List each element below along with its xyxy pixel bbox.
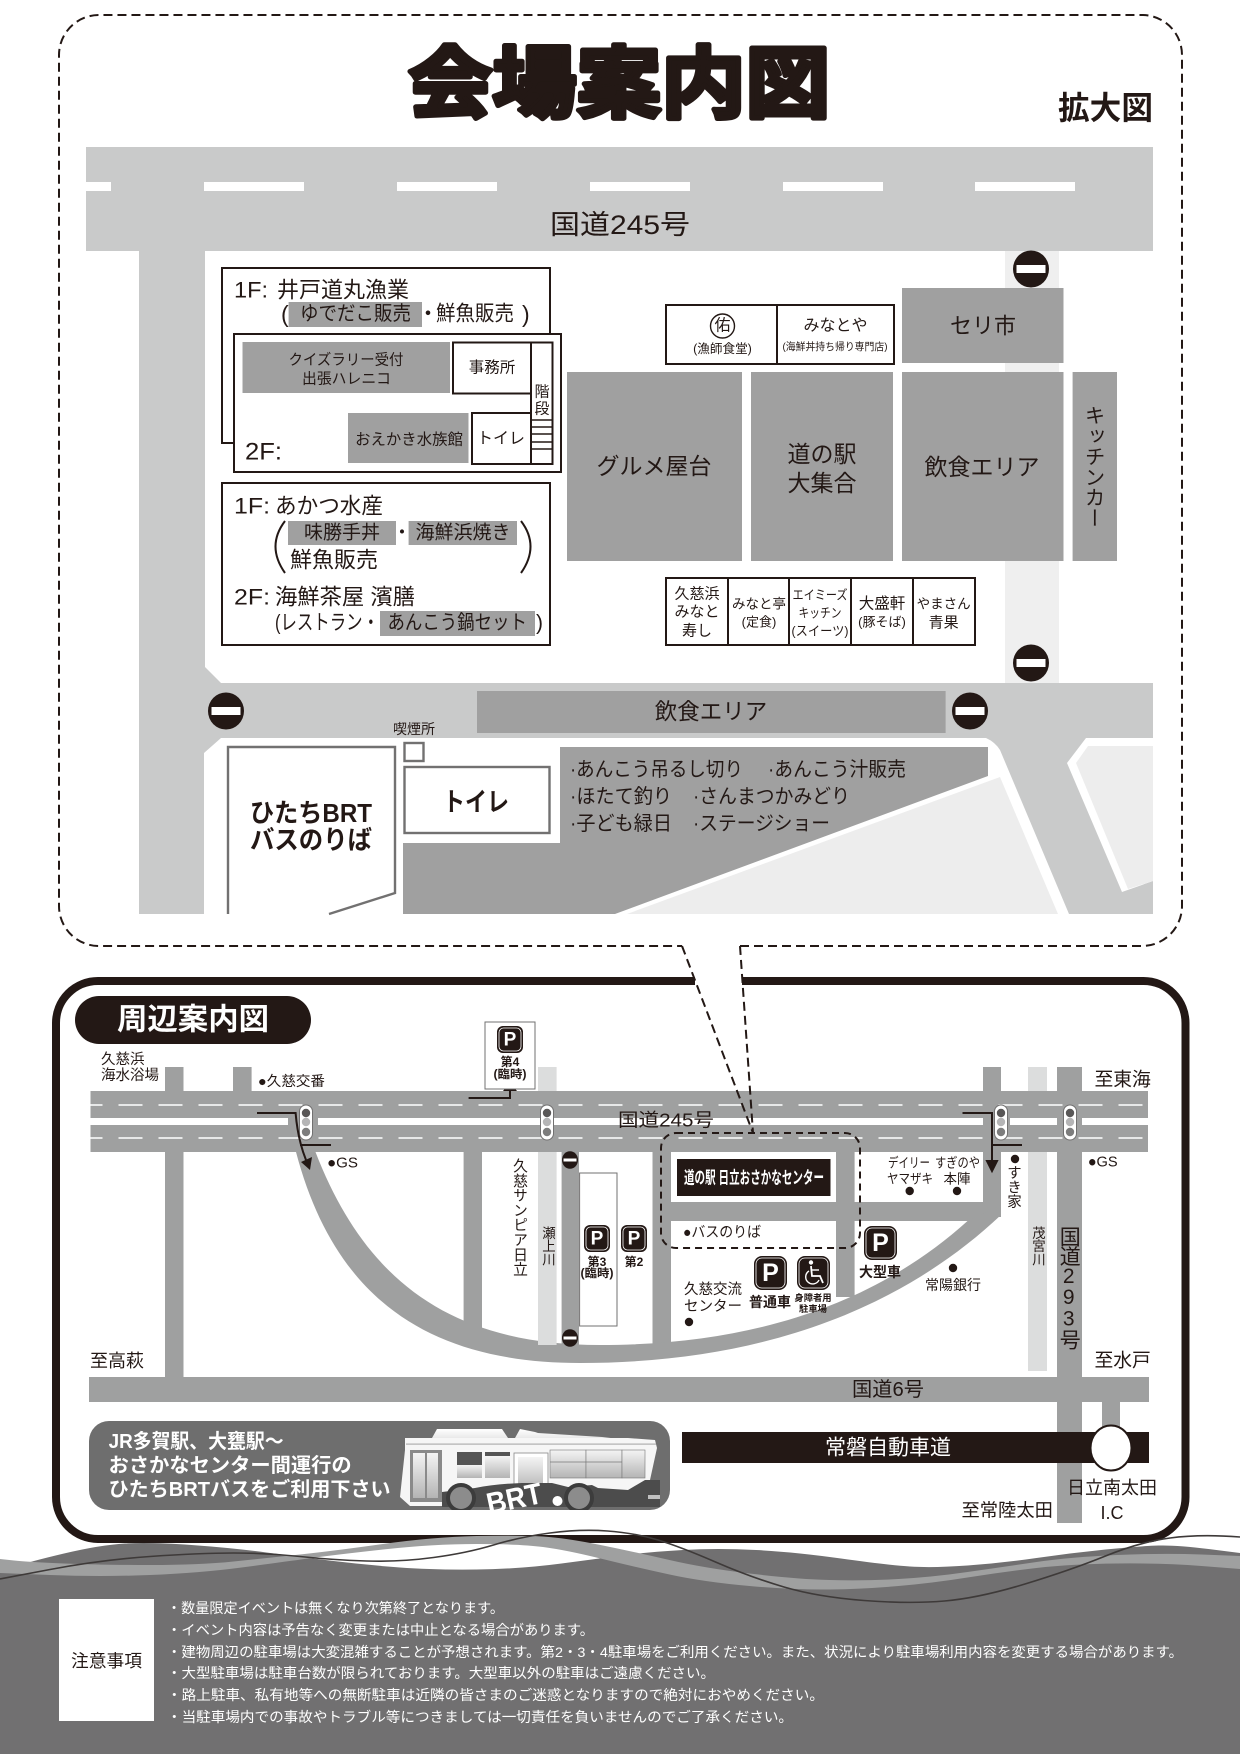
parking: regular car: 普通車 [749,1294,791,1310]
road: route 245: 国道245号 [550,210,690,240]
parking lot 4: (臨時) [494,1067,527,1081]
building: Yu and Minatoya: (海鮮丼持ち帰り専門店) [782,340,888,353]
building: Yu and Minatoya: (漁師食堂) [693,342,752,356]
event area: ·あんこう吊るし切り [570,758,743,781]
label: to Mito: 至水戸 [1094,1350,1151,1370]
frame gap for pointer [695,970,742,992]
parking lot 4 [485,1022,535,1089]
notice list: ・路上駐車、私有地等への無断駐車は近隣の皆さまのご迷惑となりますので絶対におやめください。 [167,1687,824,1703]
building: kitchen car: キッチンカー [1081,405,1104,528]
label: route 6: 国道6号 [852,1378,924,1401]
shop box: Idomichimaru 1F: 井戸道丸漁業 [277,278,409,302]
title: 会場案内図 [408,40,830,128]
BRT banner: おさかなセンター間運行の [109,1454,352,1477]
label: to Tokai: 至東海 [1094,1068,1151,1090]
shop box: Akatsu suisan: 味勝手丼 [304,522,380,544]
BRT banner: JR多賀駅、大甕駅～ [109,1430,284,1453]
parking lot 3: (臨時) [580,1266,614,1280]
notice list: ・数量限定イベントは無くなり次第終了となります。 [167,1600,504,1616]
river: Segami: 瀬上川 [540,1226,556,1266]
event area: ·ステージショー [693,813,830,835]
venue sign: 道の駅 日立おさかなセンター [684,1168,824,1188]
parking lot 3: 第3 [588,1254,607,1269]
no entry sign: small north [562,1151,578,1169]
area map frame [56,981,1186,1539]
label: to Hitachiota: 至常陸太田 [962,1500,1053,1520]
parking lot 2: 第2 [625,1254,644,1269]
shop box: Akatsu suisan: 鮮魚販売 [290,548,378,572]
dashed callout outline [59,15,1182,946]
shop box: Akatsu suisan: ・ [394,524,410,542]
floor plan: 2F [234,334,561,472]
shop row: 寿し [682,622,712,640]
river: Nomiya: 茂宮川 [1030,1226,1046,1266]
no entry sign: lane south [1013,644,1049,682]
floor plan: 2F: 段 [534,400,550,418]
BRT bus stop: バスのりば [250,825,372,855]
toilet: トイレ [443,787,509,817]
smoking area: 喫煙所 [393,721,435,737]
notice list: ・大型駐車場は駐車台数が限られております。大型車以外の駐車はご遠慮ください。 [167,1665,715,1681]
interchange circle [1090,1426,1132,1470]
traffic signal 3 [994,1105,1008,1140]
parking: accessible: 駐車場 [799,1303,827,1314]
shop row [666,578,975,645]
label: beach: 海水浴場 [101,1067,159,1084]
label: route 293: 国道293号 [1057,1226,1081,1350]
expressway [682,1432,1149,1463]
shop box: Akatsu suisan: (レストラン・ [275,612,379,634]
parking lot 3 [580,1173,617,1326]
dining area band: 飲食エリア [655,700,767,724]
dining area band [477,691,946,733]
notice heading box [59,1599,154,1721]
arrow: east turn [962,1113,1022,1171]
traffic signal 2 [540,1105,554,1140]
road lane dashes [90,1105,1148,1138]
shop box: Idomichimaru 1F: ( [281,301,289,327]
smoking area [393,721,435,761]
label: Daily Yamazaki: デイリー [888,1154,930,1170]
parking lot 3: P [591,1228,604,1250]
river: Segami [538,1067,557,1345]
shop box: Akatsu suisan: 海鮮浜焼き [415,522,511,544]
shop box: Akatsu suisan: ) [536,612,543,634]
event area: ·ほたて釣り [570,785,672,808]
parking: accessible [794,1256,832,1314]
label: Kuji center [684,1281,742,1326]
parking: large vehicle: 大型車 [859,1264,901,1280]
shop row: 久慈浜 [674,586,720,602]
building: michi no eki: 道の駅 [788,441,856,467]
building: Yu and Minatoya: みなとや [803,316,868,334]
arrow: to lot 4 [469,1083,515,1098]
building: dining area [902,372,1064,561]
parking lot 2: P [628,1228,641,1250]
event area: ·子ども緑日 [570,812,672,835]
shop box: Akatsu suisan [222,483,550,645]
panel: enlarged map callout [59,15,1182,946]
wave: light band [0,1536,1240,1590]
label: Kuji center: 久慈交流 [684,1281,742,1298]
label: Suginoya [935,1156,980,1195]
notice heading box: 注意事項 [71,1651,143,1671]
shop box: Idomichimaru 1F: 鮮魚販売 [436,302,514,326]
shop box: Idomichimaru 1F: ゆでだこ販売 [300,302,411,325]
floor plan: 2F: 出張ハレニコ [302,370,391,388]
area: light lot east [1076,746,1153,889]
label: beach: 久慈浜 [101,1051,145,1068]
shop box: Akatsu suisan: 1F: [234,494,270,518]
traffic signal 1 [300,1105,312,1140]
building: Yu and Minatoya: 佑 [714,316,731,334]
panel: area map [56,970,1186,1539]
label pill: area map: 周辺案内図 [117,1004,269,1036]
label: Suginoya: 本陣 [944,1172,970,1186]
expressway: 常磐自動車道 [825,1436,951,1460]
no entry sign: east [952,692,988,730]
building: Seri market: セリ市 [950,314,1016,338]
road label: route 245: 国道245号 [618,1110,714,1130]
event area: ·あんこう汁販売 [768,758,906,781]
floor plan: 2F: 事務所 [469,358,515,376]
shop row: みなと [674,604,720,620]
parking lot 4: 第4 [501,1054,520,1069]
parking lot 2 [621,1225,647,1269]
building: kitchen car [1073,372,1117,561]
label: Joyo bank [925,1264,981,1293]
floor plan: 2F: 階 [534,384,550,400]
BRT banner [89,1421,670,1510]
notice list: ・建物周辺の駐車場は大変混雑することが予想されます。第2・3・4駐車場をご利用ください。また、状況により駐車場利用内容を変更する場合があります。 [167,1644,1183,1660]
building: dining area: 飲食エリア [924,454,1040,480]
parking lot 4: P [504,1030,517,1050]
heading: enlarged map: 拡大図 [1058,90,1153,126]
footer waves [0,1530,1240,1754]
building: michi no eki: 大集合 [788,470,856,496]
BRT bus stop [228,747,395,914]
river: Nomiya [1028,1067,1047,1371]
label: Kuji center: センター [684,1298,742,1315]
no entry sign: small south [562,1329,578,1347]
label pill: area map [75,996,311,1044]
arrow: west turn [257,1113,331,1170]
shop box: Idomichimaru 1F: ・ [419,304,437,324]
label: Sukiya: すき家 [1005,1165,1021,1210]
parking: large vehicle [859,1226,901,1280]
label: Suginoya: すぎのや [935,1156,980,1170]
toilet [404,767,550,833]
floor plan: 2F: トイレ [477,430,525,448]
BRT bus stop: ひたちBRT [250,798,372,828]
notice list [167,1600,1183,1725]
wave: dark ground [0,1543,1240,1754]
road network [89,1067,1149,1523]
shop row: やまさん [917,596,971,612]
shop box: Akatsu suisan: あかつ水産 [275,494,383,518]
shop box: Akatsu suisan: 海鮮茶屋 濱膳 [275,584,415,610]
shop box: Idomichimaru 1F [222,268,550,443]
event area [403,747,988,914]
label: Hitachi Minami Ota IC [1067,1478,1157,1523]
building: gourmet stalls [567,372,742,561]
traffic signal 4 [1064,1105,1076,1140]
label: Daily Yamazaki [887,1154,933,1195]
notice list: ・当駐車場内での事故やトラブル等につきましては一切責任を負いませんのでご了承ください。 [167,1709,793,1725]
floor plan: 2F: おえかき水族館 [355,430,463,448]
label: beach [101,1051,159,1084]
shop row: (定食) [742,614,776,630]
label: Hitachi Minami Ota IC: 日立南太田 [1067,1478,1157,1498]
shop row: (豚そば) [858,614,906,630]
venue sign [677,1159,830,1196]
floor plan: 2F: クイズラリー受付 [288,352,404,368]
parking: regular car [749,1256,791,1310]
venue dashed highlight [661,1133,860,1248]
icon: bus [400,1429,660,1510]
label: Joyo bank: 常陽銀行 [925,1277,981,1293]
parking: accessible: 身障者用 [794,1292,832,1303]
shop row: キッチン [798,606,842,620]
building: gourmet stalls: グルメ屋台 [596,453,712,479]
label: police box: ●久慈交番 [258,1073,325,1089]
road: west side and lower roads [139,251,1153,914]
area: light lot south [627,777,1058,914]
event area: ·さんまつかみどり [693,785,850,808]
parking: large vehicle: P [872,1229,889,1257]
label: bus stop: ●バスのりば [683,1224,761,1241]
label: Daily Yamazaki: ヤマザキ [887,1172,933,1186]
shop box: Idomichimaru 1F: 1F: [234,278,268,302]
shop row: みなと亭 [732,596,786,612]
shop row: (スイーツ) [792,624,848,638]
label: Sunpia: 久慈サンピア日立 [511,1158,527,1277]
icon: bus: BRT [484,1477,545,1521]
shop box: Akatsu suisan: 2F: [234,584,270,610]
road: light lane east [1005,251,1059,683]
floor plan: 2F: 2F: [245,438,282,466]
label: GS west: ●GS [327,1154,358,1172]
no entry sign: top [1013,250,1049,288]
shop row: 大盛軒 [859,594,905,612]
building: michi no eki [751,372,893,561]
road: route 245 [86,147,1153,251]
label: GS east: ●GS [1088,1154,1118,1170]
building: Yu and Minatoya [666,305,894,364]
notice list: ・イベント内容は予告なく変更または中止となる場合があります。 [167,1622,594,1638]
pointer dashed lines [682,946,753,1133]
parking: regular car: P [762,1259,779,1287]
shop row: エイミーズ [792,588,848,602]
shop box: Idomichimaru 1F: ) [522,301,530,327]
label: Hitachi Minami Ota IC: I.C [1100,1503,1124,1523]
BRT banner: ひたちBRTバスをご利用下さい [109,1477,391,1501]
shop row: 青果 [929,614,959,632]
building: Seri market [902,288,1064,363]
shop box: Akatsu suisan: あんこう鍋セット [388,611,527,634]
label: to Takahagi: 至高萩 [90,1351,144,1371]
wave: thin line [0,1530,1240,1602]
no entry sign: west [208,692,244,730]
